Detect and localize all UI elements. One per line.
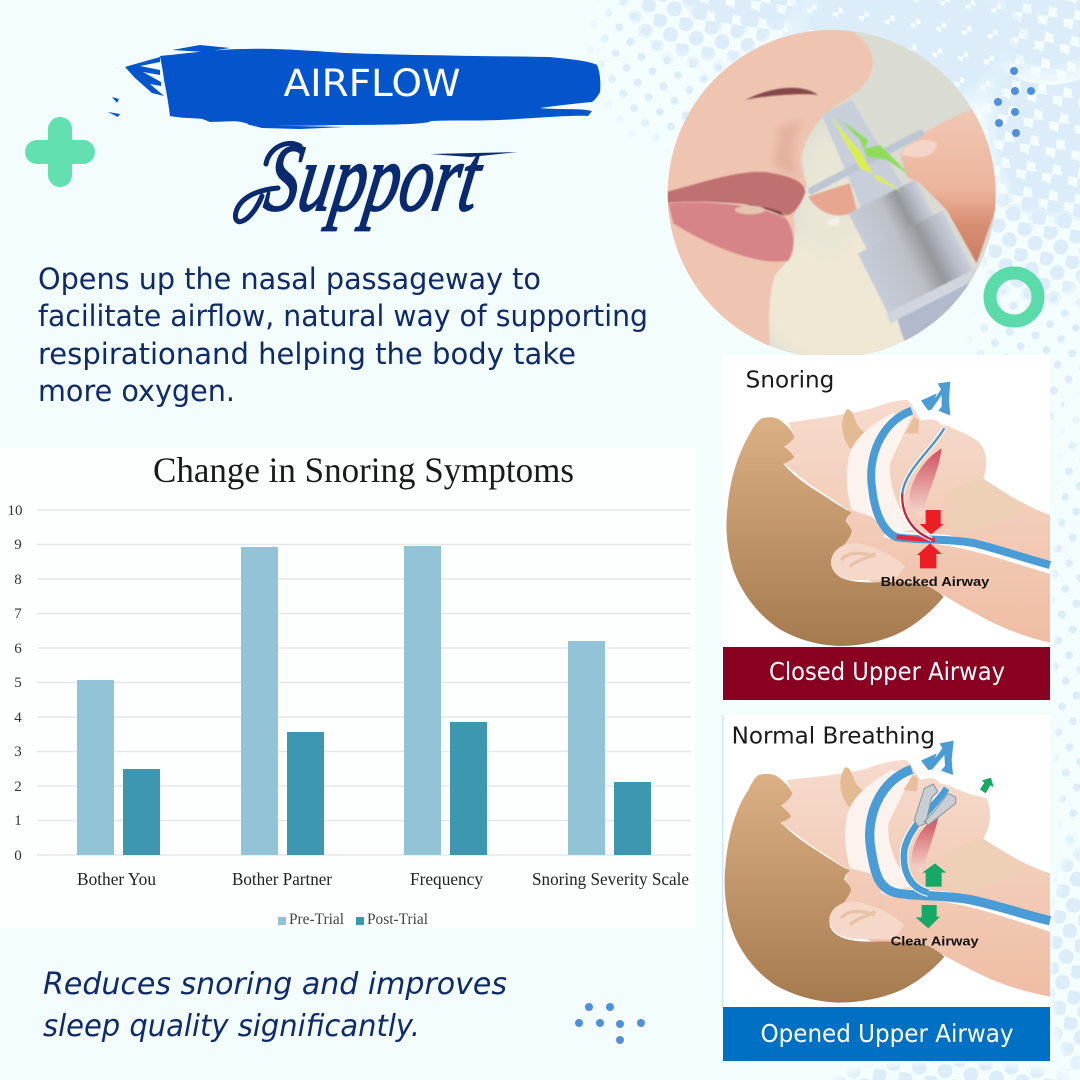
chart category labels: Bother Partner bbox=[232, 869, 332, 889]
chart bars post-trial bbox=[123, 722, 651, 855]
chart y axis labels bbox=[8, 503, 22, 864]
blue exhale arrow bbox=[921, 382, 950, 416]
chart y axis labels: 6 bbox=[14, 641, 22, 657]
panel: snoring diagram bbox=[722, 355, 1050, 648]
chart gridlines bbox=[37, 510, 691, 855]
head illustration: normal breathing bbox=[725, 741, 1050, 1003]
chart bars pre-trial bbox=[77, 546, 605, 855]
body text: Opens up the nasal passageway to bbox=[38, 262, 541, 296]
green arrows bbox=[916, 778, 994, 928]
chart y axis labels: 7 bbox=[14, 606, 22, 622]
red arrows bbox=[917, 510, 944, 568]
chart y axis labels: 8 bbox=[14, 572, 22, 588]
chart category labels: Bother You bbox=[77, 869, 156, 889]
chart y axis labels: 5 bbox=[14, 675, 22, 691]
decorative green ring bbox=[990, 273, 1038, 321]
body text: more oxygen. bbox=[38, 374, 235, 408]
blue exhale arrow bbox=[921, 741, 954, 775]
chart category labels: Frequency bbox=[410, 869, 483, 889]
blocked airway label: Blocked Airway bbox=[881, 575, 989, 589]
chart y axis labels: 1 bbox=[14, 813, 22, 829]
chart category labels: Snoring Severity Scale bbox=[532, 869, 689, 889]
heading: Support script: Support bbox=[258, 125, 491, 231]
chart y axis labels: 0 bbox=[14, 848, 22, 864]
decorative dots top right bbox=[994, 67, 1035, 137]
chart y axis labels: 9 bbox=[14, 537, 22, 553]
body text bbox=[38, 262, 648, 408]
chart y axis labels: 2 bbox=[14, 779, 22, 795]
caption band: closed upper airway: Closed Upper Airway bbox=[769, 657, 1005, 686]
body text: facilitate airflow, natural way of supporting bbox=[38, 299, 648, 333]
decorative dots bottom bbox=[575, 1003, 645, 1044]
closing statement: sleep quality significantly. bbox=[43, 1009, 420, 1044]
chart legend: Pre-Trial bbox=[289, 911, 345, 928]
panel: normal breathing diagram bbox=[722, 715, 1050, 1008]
chart y axis labels: 4 bbox=[14, 710, 22, 726]
banner word: AIRFLOW bbox=[284, 62, 460, 105]
nasal device bbox=[914, 784, 956, 827]
chart title: Change in Snoring Symptoms bbox=[153, 450, 574, 490]
closing statement: Reduces snoring and improves bbox=[43, 967, 507, 1002]
normal breathing label: Normal Breathing bbox=[732, 723, 935, 749]
background halftone pattern bbox=[591, 0, 1080, 1080]
caption band: opened upper airway bbox=[723, 1007, 1050, 1061]
chart y axis labels: 3 bbox=[14, 744, 22, 760]
decorative plus icon bbox=[37, 129, 83, 175]
closing statement bbox=[43, 967, 507, 1044]
caption band: opened upper airway: Opened Upper Airway bbox=[760, 1019, 1014, 1048]
body text: respirationand helping the body take bbox=[38, 337, 576, 371]
snoring label: Snoring bbox=[746, 367, 834, 393]
clear airway label: Clear Airway bbox=[891, 934, 979, 948]
chart y axis labels: 10 bbox=[8, 503, 22, 519]
chart category labels bbox=[77, 869, 689, 889]
caption band: closed upper airway bbox=[723, 647, 1050, 700]
head illustration: snoring bbox=[726, 382, 1050, 646]
heading: AIRFLOW brush banner bbox=[108, 45, 600, 129]
chart legend bbox=[278, 911, 429, 928]
panel: chart bbox=[0, 448, 695, 928]
chart legend: Post-Trial bbox=[367, 911, 429, 928]
nasal spray photo bbox=[668, 30, 996, 355]
